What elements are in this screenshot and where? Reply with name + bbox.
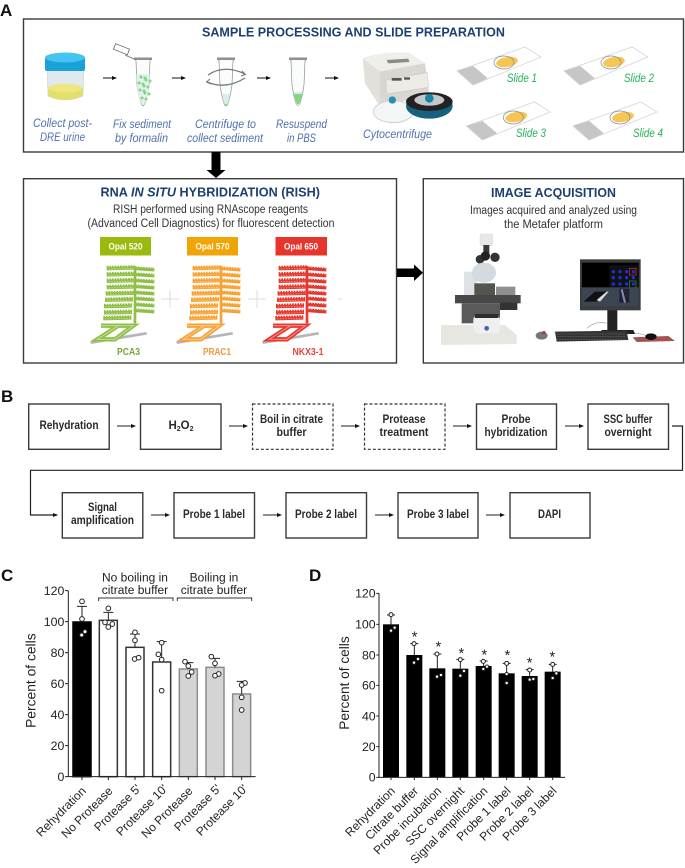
y tick labels: 40 <box>362 709 376 723</box>
illustration: PCA3 probe <box>91 266 154 343</box>
text: RISH description: (Advanced Cell Diagnostics) for fluorescent detection <box>88 218 334 230</box>
step: Signal amplification: Signal <box>88 502 117 514</box>
y tick labels: 60 <box>51 677 64 691</box>
icon: slide 4 <box>573 102 657 140</box>
x tick labels: Probe 3 label <box>500 784 559 844</box>
significance asterisks: * <box>549 650 555 666</box>
text: step captions <box>33 118 432 145</box>
y tick labels: 80 <box>362 648 376 662</box>
step: Probe hybridization: hybridization <box>484 427 548 439</box>
arrow <box>325 77 338 79</box>
step: Probe hybridization: Probe <box>502 414 530 426</box>
flowchart: workflow <box>29 404 682 538</box>
axes <box>376 593 565 780</box>
bracket: boiling: Boiling in <box>190 570 238 584</box>
x tick labels: Probe 1 label <box>454 784 513 844</box>
significance asterisks: * <box>412 629 418 645</box>
text: slide labels <box>507 73 663 140</box>
label: Opal 570 <box>187 237 238 256</box>
heading: sample processing: SAMPLE PROCESSING AND SLIDE PREPARATION <box>202 26 505 40</box>
arrow: to image acquisition <box>397 264 423 281</box>
step: DAPI <box>510 493 590 538</box>
y tick labels: 100 <box>355 618 376 632</box>
heading: RISH: RNA IN SITU HYBRIDIZATION (RISH) <box>100 186 320 200</box>
significance asterisks: * <box>481 648 487 664</box>
step: Protease treatment: treatment <box>380 427 429 439</box>
illustration: NKX3-1 probe <box>263 266 326 343</box>
bar chart: panel C <box>23 570 256 841</box>
y tick labels: 120 <box>355 587 376 601</box>
step: Protease treatment: Protease <box>382 414 426 426</box>
x tick labels: Protease 10' <box>193 782 250 839</box>
y tick labels: 20 <box>51 739 64 753</box>
y tick labels: 80 <box>51 646 64 660</box>
label: panel D: D <box>309 566 321 585</box>
text: probe names: PRAC1 <box>203 347 231 358</box>
icon: plus signs <box>161 290 342 308</box>
bars <box>73 620 251 777</box>
x tick labels: SSC overnight <box>403 783 468 848</box>
step: H2O2 <box>140 404 221 449</box>
step: H2O2: O <box>181 420 190 432</box>
step: SSC buffer overnight <box>588 404 668 449</box>
step: Probe 1 label <box>174 493 254 538</box>
label: Opal 650: Opal 650 <box>284 242 318 252</box>
step: Signal amplification: amplification <box>71 515 134 527</box>
y tick labels: 0 <box>369 771 376 785</box>
label: panel A: A <box>0 1 12 20</box>
error bars <box>387 615 557 676</box>
icon: resuspended tube <box>289 58 307 106</box>
step: H2O2: 2 <box>190 426 194 433</box>
step: SSC buffer overnight: SSC buffer <box>604 414 653 426</box>
step: H2O2: 2 <box>177 426 181 433</box>
data points <box>80 599 247 712</box>
label: Opal 570: Opal 570 <box>196 242 230 252</box>
significance asterisks: * <box>504 648 510 664</box>
x tick labels: Probe 2 label <box>477 784 536 844</box>
x tick labels: Rehydration <box>33 784 89 839</box>
x tick labels: No Protease <box>138 784 196 841</box>
image: microscope <box>441 234 521 345</box>
y tick labels: 60 <box>362 679 376 693</box>
x tick labels: No Protease <box>58 784 116 841</box>
text: probe names: NKX3-1 <box>292 347 324 358</box>
y tick labels: 0 <box>57 770 64 784</box>
label: panel B: B <box>1 387 13 406</box>
x tick labels: Protease 5' <box>91 782 144 834</box>
text: step captions: collect sediment <box>187 133 264 145</box>
text: step captions: Collect post- <box>33 118 92 130</box>
label: Opal 520: Opal 520 <box>108 242 142 252</box>
icon: urine cup <box>45 52 85 100</box>
bars <box>383 624 561 777</box>
bracket: boiling <box>177 570 252 601</box>
significance asterisks: * <box>458 646 464 662</box>
step: Probe 2 label: Probe 2 label <box>295 509 357 521</box>
icon: slide 1 <box>457 47 541 85</box>
bracket: no boiling: No boiling in <box>102 570 168 584</box>
step: Probe 3 label <box>398 493 478 538</box>
error bars <box>77 606 247 694</box>
text: slide labels: Slide 2 <box>624 73 655 85</box>
x tick labels <box>33 782 250 841</box>
step: Boil in citrate buffer: buffer <box>276 427 307 439</box>
step: Probe 1 label: Probe 1 label <box>183 509 245 521</box>
bracket: no boiling: citrate buffer <box>102 583 168 597</box>
y tick labels: 100 <box>44 615 64 629</box>
bracket: boiling: citrate buffer <box>181 583 247 597</box>
text: step captions: DRE urine <box>40 132 85 144</box>
icon: slide 3 <box>466 102 550 140</box>
data points <box>389 613 558 685</box>
icon: tube with formalin <box>113 44 152 106</box>
arrow: down to RISH <box>206 152 226 178</box>
x tick labels: Probe incubation <box>371 784 444 857</box>
y tick labels <box>44 584 64 784</box>
label: Opal 650 <box>276 237 327 256</box>
text: image description <box>470 205 637 231</box>
image: monitor, keyboard and mouse <box>536 259 675 342</box>
text: slide labels: Slide 3 <box>516 128 547 140</box>
image: cytocentrifuge <box>363 53 453 123</box>
x tick labels: Citrate buffer <box>362 784 421 843</box>
panel: image acquisition <box>423 179 684 363</box>
text: step captions: Resuspend <box>276 119 328 131</box>
significance asterisks <box>412 629 555 672</box>
step: Boil in citrate buffer <box>252 404 333 449</box>
arrow <box>103 77 116 79</box>
icon: centrifuge tube <box>206 58 246 106</box>
x tick labels: Signal amplification <box>408 784 490 867</box>
x tick labels: Protease 5' <box>171 782 224 834</box>
x tick labels: Rehydration <box>342 784 398 839</box>
text: probe names: PCA3 <box>117 347 140 358</box>
step: Probe 3 label: Probe 3 label <box>407 509 469 521</box>
significance asterisks: * <box>527 656 533 672</box>
significance asterisks: * <box>435 639 441 655</box>
step: Boil in citrate buffer: Boil in citrate <box>260 414 323 426</box>
panel: sample processing and slide preparation <box>24 19 684 152</box>
heading: image acquisition: IMAGE ACQUISITION <box>491 186 616 200</box>
text: slide labels: Slide 1 <box>507 73 537 85</box>
label: panel C: C <box>1 566 13 585</box>
step: Protease treatment <box>364 404 445 449</box>
arrow <box>172 77 185 79</box>
step: Signal amplification <box>62 493 143 538</box>
bracket: no boiling <box>99 570 173 601</box>
arrows: flow connectors <box>30 426 682 515</box>
axes <box>65 591 256 780</box>
step: SSC buffer overnight: overnight <box>604 427 652 439</box>
text: RISH description: RISH performed using RNAscope reagents <box>113 204 308 216</box>
text: step captions: by formalin <box>115 133 168 145</box>
step: DAPI: DAPI <box>538 509 561 521</box>
text: image description: the Metafer platform <box>504 219 603 231</box>
step: Probe 2 label <box>286 493 366 538</box>
y tick labels: 120 <box>44 584 64 598</box>
text: probe names <box>117 347 324 358</box>
step: Rehydration: Rehydration <box>40 420 98 432</box>
text: step captions: Cytocentrifuge <box>363 129 432 141</box>
y tick labels: 20 <box>362 740 376 754</box>
x tick labels: Protease 10' <box>113 782 170 839</box>
step: Rehydration <box>29 404 109 449</box>
bar chart: panel D <box>337 587 565 867</box>
arrow <box>257 77 270 79</box>
x tick labels <box>342 783 559 867</box>
illustration: PRAC1 probe <box>177 266 240 343</box>
icon: slide 2 <box>564 47 648 85</box>
step: H2O2: H <box>168 420 177 432</box>
y axis title: Percent of cells <box>23 633 39 728</box>
panel: RNA in situ hybridization <box>24 179 396 363</box>
text: step captions: Fix sediment <box>113 119 172 131</box>
y tick labels <box>355 587 376 785</box>
y axis title: Percent of cells <box>337 636 352 730</box>
step: Probe hybridization <box>476 404 556 449</box>
text: step captions: in PBS <box>287 133 316 145</box>
text: RISH description <box>88 204 334 230</box>
text: slide labels: Slide 4 <box>633 128 663 140</box>
text: step captions: Centrifuge to <box>195 119 257 131</box>
text: image description: Images acquired and analyzed using <box>470 205 637 217</box>
label: Opal 520 <box>100 237 151 256</box>
y tick labels: 40 <box>51 708 64 722</box>
